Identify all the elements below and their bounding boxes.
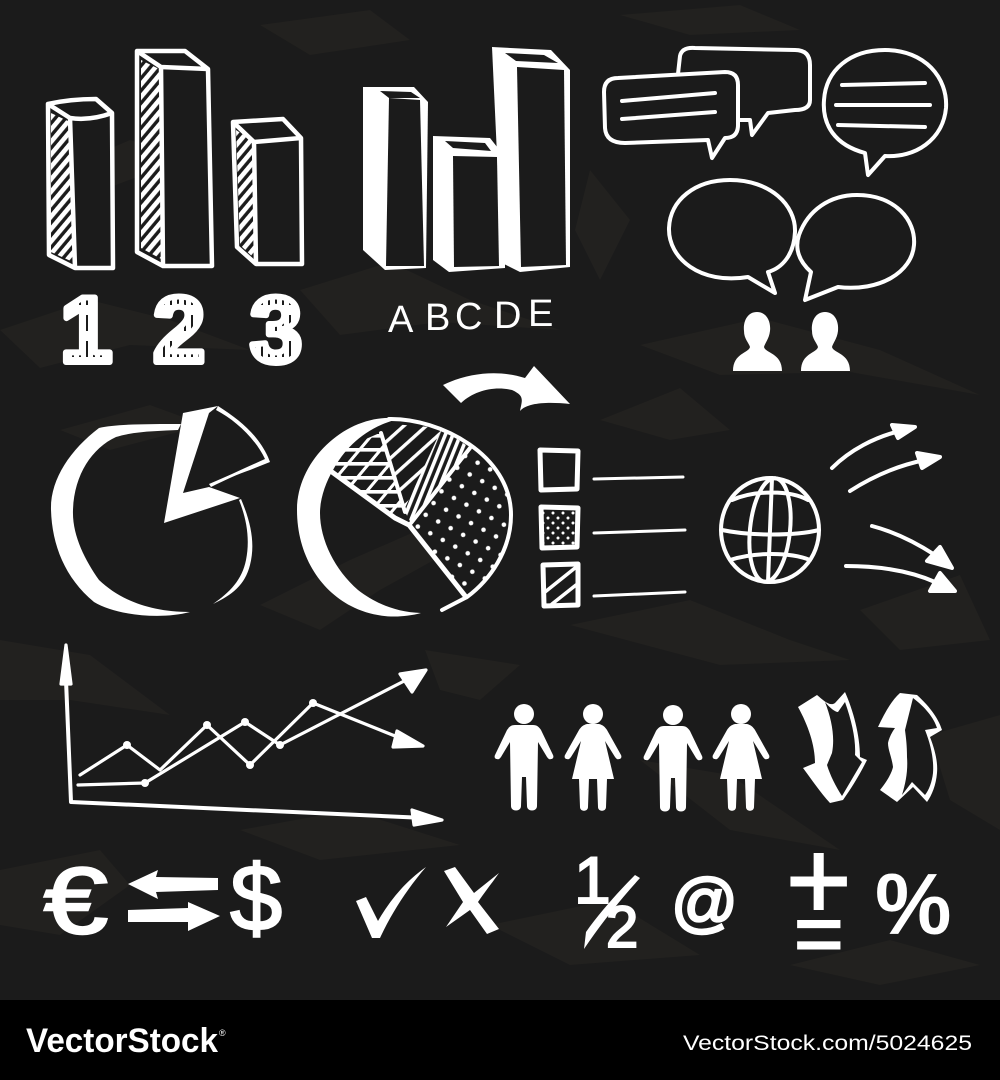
woman <box>713 704 769 811</box>
pie chart: patterned <box>297 418 511 617</box>
right empty bubble <box>797 195 914 300</box>
swoosh arrows up and down <box>798 692 942 803</box>
bar A <box>363 87 428 270</box>
round bubble with text lines <box>824 50 946 175</box>
euro sign: € <box>44 849 108 954</box>
icon: check mark <box>356 867 426 938</box>
icon: two people <box>733 312 850 371</box>
up arrow <box>878 693 942 802</box>
bar chart: solid 3D bars with letters <box>363 47 570 341</box>
brand name: VectorStock <box>26 1022 218 1060</box>
down arrow <box>798 692 867 803</box>
bar B <box>433 136 505 272</box>
pie outlines <box>332 419 511 610</box>
legend item hatched <box>543 564 578 606</box>
watermark bar: ® <box>219 1028 226 1038</box>
pie chart: exploded slice <box>51 406 270 616</box>
icon: globe with arrows <box>721 425 955 591</box>
bar C <box>492 47 570 272</box>
curved arrow <box>443 366 570 411</box>
watermark bar <box>0 1000 1000 1080</box>
exchange arrows <box>128 870 220 931</box>
plus minus: + <box>786 818 851 943</box>
person right <box>801 312 850 371</box>
letters A B C D E: ABCDE <box>388 293 553 341</box>
finely striped slice <box>404 428 470 523</box>
numbers 1 2 3 <box>60 277 302 382</box>
bar 2 <box>137 51 212 266</box>
front rectangular bubble <box>604 72 738 158</box>
plus minus: = <box>794 887 844 982</box>
series two <box>78 678 410 785</box>
legend <box>540 450 685 606</box>
percent sign: % <box>875 857 951 953</box>
man <box>644 705 702 812</box>
speech bubbles <box>604 48 946 300</box>
bubble text lines <box>622 93 715 119</box>
bar chart: hatched 3D bars with numbers <box>48 51 302 382</box>
image url: VectorStock.com/5024625 <box>683 1031 972 1055</box>
bar 1 <box>48 99 113 268</box>
series one <box>80 703 405 775</box>
cross-hatched slice <box>332 432 406 520</box>
dotted slice <box>411 448 510 597</box>
currency exchange symbols <box>44 845 282 954</box>
man <box>495 704 553 810</box>
legend item empty <box>540 450 578 490</box>
person left <box>733 312 782 371</box>
fraction one half <box>574 843 640 960</box>
arrows <box>832 425 955 591</box>
bar 3 <box>233 119 302 264</box>
people row <box>495 704 769 812</box>
striped slice <box>382 424 442 510</box>
left empty bubble <box>669 180 795 293</box>
numbers 1 2 3: 2 <box>153 277 205 382</box>
line chart <box>61 645 442 825</box>
data points <box>123 699 317 787</box>
icon: cross mark <box>444 867 499 934</box>
woman <box>565 704 621 811</box>
dollar sign: $ <box>230 845 282 950</box>
numbers 1 2 3: 3 <box>250 277 302 382</box>
axes <box>66 680 425 818</box>
fraction one half: 1 <box>574 843 611 917</box>
numbers 1 2 3: 1 <box>60 277 112 382</box>
legend item dotted <box>541 507 578 548</box>
globe <box>721 476 819 584</box>
pie crescent <box>297 418 421 617</box>
back rectangular bubble <box>678 48 810 135</box>
at sign: @ <box>671 865 738 939</box>
fraction one half: 2 <box>606 895 638 960</box>
